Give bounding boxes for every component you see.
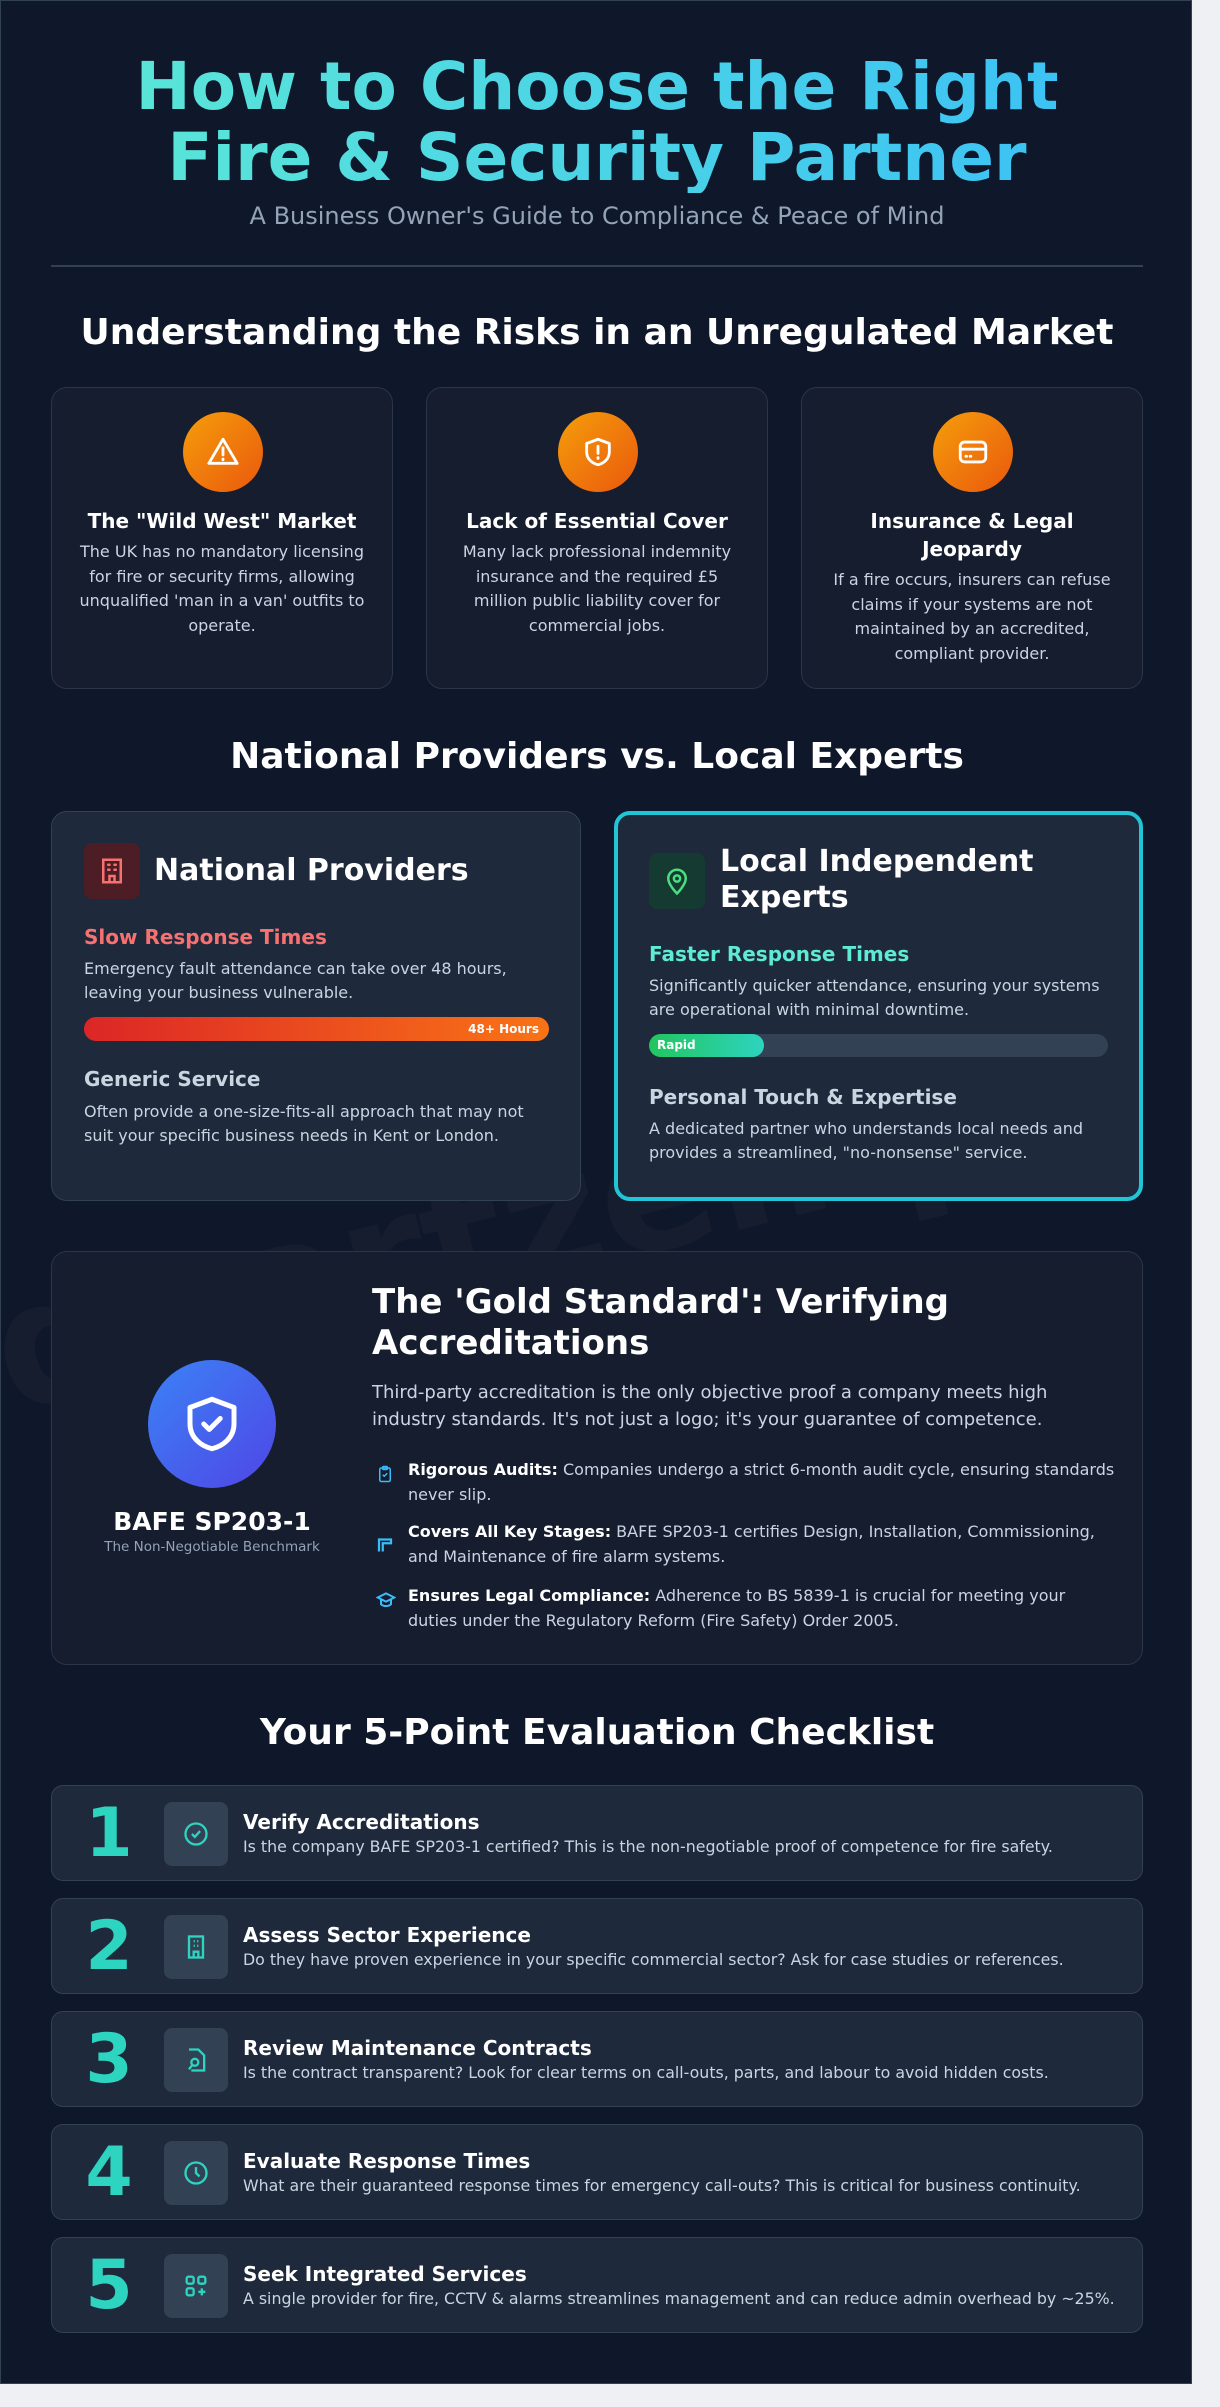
icon: warning <box>183 412 263 492</box>
heading: The 'Gold Standard': Verifying <box>372 1282 949 1322</box>
text: A dedicated partner who understands local needs and provides a streamlined, "no-nonsense" service. <box>649 1119 1083 1162</box>
bar: 48+ hours <box>84 1017 549 1041</box>
checklist item 5: 5 <box>85 2246 133 2325</box>
icon: clock <box>164 2141 228 2205</box>
checklist item 5: Seek Integrated Services <box>243 2262 527 2286</box>
card heading: Jeopardy <box>922 537 1022 561</box>
bullet: compliance: duties under the Regulatory Reform (Fire Safety) Order 2005. <box>408 1610 899 1630</box>
badge label: BAFE SP203-1 <box>113 1507 311 1536</box>
checklist item 4: 4 <box>85 2133 133 2212</box>
checklist item 1: 1 <box>85 1794 133 1873</box>
panel: insurance <box>801 387 1143 689</box>
icon: shield check <box>148 1360 276 1488</box>
text: Emergency fault attendance can take over 48 hours, leaving your business vulnerable. <box>84 959 507 1002</box>
checklist item 3 <box>51 2011 1143 2107</box>
checklist item 1 <box>51 1785 1143 1881</box>
panel: wild west <box>51 387 393 689</box>
checklist item 5: A single provider for fire, CCTV & alarms streamlines management and can reduce admin overhead by ~25%. <box>243 2289 1115 2308</box>
checklist item 2 <box>51 1898 1143 1994</box>
heading: Accreditations <box>372 1323 649 1363</box>
bullet: stages: Covers All Key Stages: BAFE SP203-1 certifies Design, Installation, Commissioning, <box>408 1522 1095 1541</box>
text: Often provide a one-size-fits-all approach that may not suit your specific business needs in Kent or London. <box>84 1102 524 1145</box>
bullet: compliance <box>376 1586 1066 1630</box>
heading <box>372 1282 949 1363</box>
bullet: stages: and Maintenance of fire alarm systems. <box>408 1546 725 1566</box>
bullet: audits <box>379 1460 1114 1504</box>
title <box>1 51 1193 193</box>
checklist item 2: Assess Sector Experience <box>243 1923 531 1947</box>
text: Significantly quicker attendance, ensuring your systems are operational with minimal downtime. <box>649 976 1100 1019</box>
icon: shield <box>558 412 638 492</box>
bullet: compliance: Ensures Legal Compliance: Adherence to BS 5839-1 is crucial for meeting your <box>408 1586 1065 1605</box>
checklist item 3: Is the contract transparent? Look for clear terms on call-outs, parts, and labour to avoid hidden costs. <box>243 2063 1049 2082</box>
title: Fire & Security Partner <box>167 119 1027 196</box>
heading <box>720 844 1034 915</box>
checklist item 2: 2 <box>85 1907 133 1986</box>
panel: gold standard <box>51 1251 1143 1665</box>
heading: Local Independent <box>720 844 1034 879</box>
panel: lack of cover <box>426 387 768 689</box>
checklist item 1: Verify Accreditations <box>243 1810 480 1834</box>
badge: BAFE: The Non-Negotiable Benchmark <box>104 1539 320 1555</box>
bar: rapid: Rapid <box>657 1038 696 1052</box>
card heading: Lack of Essential Cover <box>466 509 728 533</box>
card text: If a fire occurs, insurers can refuse claims if your systems are not maintained by an accredited, compliant provider. <box>833 570 1111 662</box>
bullet: audits: never slip. <box>408 1484 491 1504</box>
checklist item 4: What are their guaranteed response times for emergency call-outs? This is critical for business continuity. <box>243 2176 1081 2195</box>
bullet: stages <box>378 1522 1095 1566</box>
checklist item 4 <box>51 2124 1143 2220</box>
bar: rapid <box>649 1034 1108 1057</box>
bar: 48+ hours: 48+ Hours <box>468 1022 539 1036</box>
card heading: The "Wild West" Market <box>88 509 356 533</box>
panel: national providers <box>51 811 581 1201</box>
heading: Experts <box>720 880 849 915</box>
badge: BAFE <box>104 1360 320 1555</box>
icon: pin <box>649 853 705 909</box>
checklist item 3: 3 <box>85 2020 133 2099</box>
icon: card <box>933 412 1013 492</box>
watermark: quartzemp <box>0 1009 1025 1451</box>
card text: The UK has no mandatory licensing for fire or security firms, allowing unqualified 'man in a van' outfits to operate. <box>80 542 364 634</box>
card heading: Insurance & Legal <box>870 509 1074 533</box>
sub: slow response: Slow Response Times <box>84 925 327 949</box>
checklist item 5 <box>51 2237 1143 2333</box>
icon: building <box>164 1915 228 1979</box>
card heading <box>870 509 1074 561</box>
heading: risks: Understanding the Risks in an Unregulated Market <box>80 312 1114 353</box>
sub: generic: Generic Service <box>84 1067 260 1091</box>
panel: local experts <box>614 811 1143 1201</box>
checklist item 4: Evaluate Response Times <box>243 2149 530 2173</box>
checklist item 2: Do they have proven experience in your specific commercial sector? Ask for case studies or references. <box>243 1950 1064 1969</box>
checklist item 3: Review Maintenance Contracts <box>243 2036 592 2060</box>
sub: faster: Faster Response Times <box>649 942 909 966</box>
card text: Many lack professional indemnity insurance and the required £5 million public liability cover for commercial jobs. <box>463 542 731 634</box>
icon: building <box>84 843 140 899</box>
checklist item 1: Is the company BAFE SP203-1 certified? This is the non-negotiable proof of competence for fire safety. <box>243 1837 1053 1856</box>
heading: checklist: Your 5-Point Evaluation Checklist <box>260 1712 934 1753</box>
heading: National Providers <box>154 853 469 888</box>
bullet: audits: Rigorous Audits: Companies undergo a strict 6-month audit cycle, ensuring standards <box>408 1460 1114 1479</box>
icon: grid plus <box>164 2254 228 2318</box>
icon: check circle <box>164 1802 228 1866</box>
paragraph: Third-party accreditation is the only objective proof a company meets high industry standards. It's not just a logo; it's your guarantee of competence. <box>372 1382 1047 1430</box>
heading: comparison: National Providers vs. Local Experts <box>230 736 964 777</box>
subtitle: A Business Owner's Guide to Compliance & Peace of Mind <box>250 202 944 230</box>
title: How to Choose the Right <box>135 48 1059 125</box>
icon: file search <box>164 2028 228 2092</box>
sub: personal: Personal Touch & Expertise <box>649 1085 957 1109</box>
